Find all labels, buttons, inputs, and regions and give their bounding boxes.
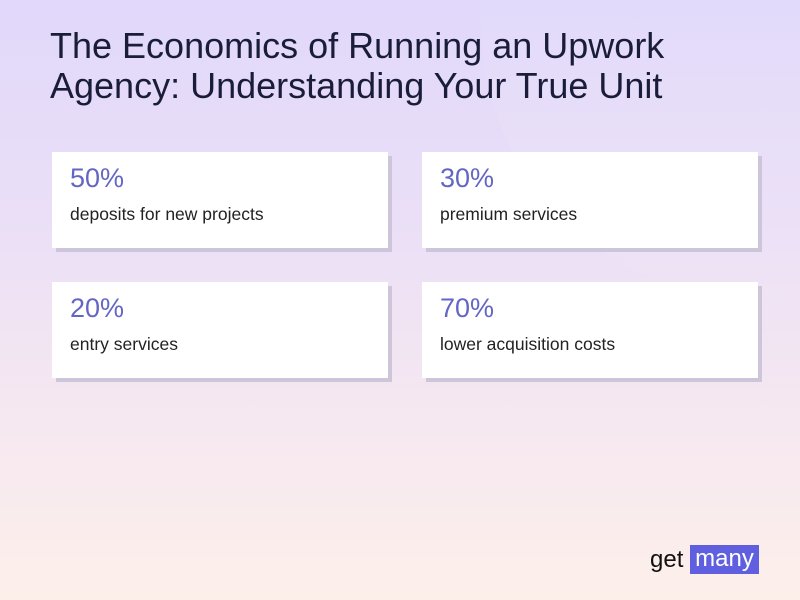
title: The Economics of Running an Upwork <box>50 25 664 66</box>
logo: many <box>695 545 754 572</box>
card: 50% deposits: deposits for new projects <box>70 204 264 224</box>
card: 70% lower costs: 70% <box>440 293 494 323</box>
title <box>50 25 664 106</box>
card: 50% deposits <box>52 152 388 248</box>
card: 70% lower costs <box>422 282 758 378</box>
card: 30% premium <box>422 152 758 248</box>
card: 50% deposits: 50% <box>70 163 124 193</box>
title: Agency: Understanding Your True Unit <box>50 65 662 106</box>
card: 30% premium: premium services <box>440 204 577 224</box>
card: 30% premium: 30% <box>440 163 494 193</box>
card: 70% lower costs: lower acquisition costs <box>440 334 615 354</box>
card: 20% entry <box>52 282 388 378</box>
card: 20% entry: 20% <box>70 293 124 323</box>
logo <box>650 545 759 574</box>
logo: get <box>650 546 683 573</box>
card: 20% entry: entry services <box>70 334 178 354</box>
